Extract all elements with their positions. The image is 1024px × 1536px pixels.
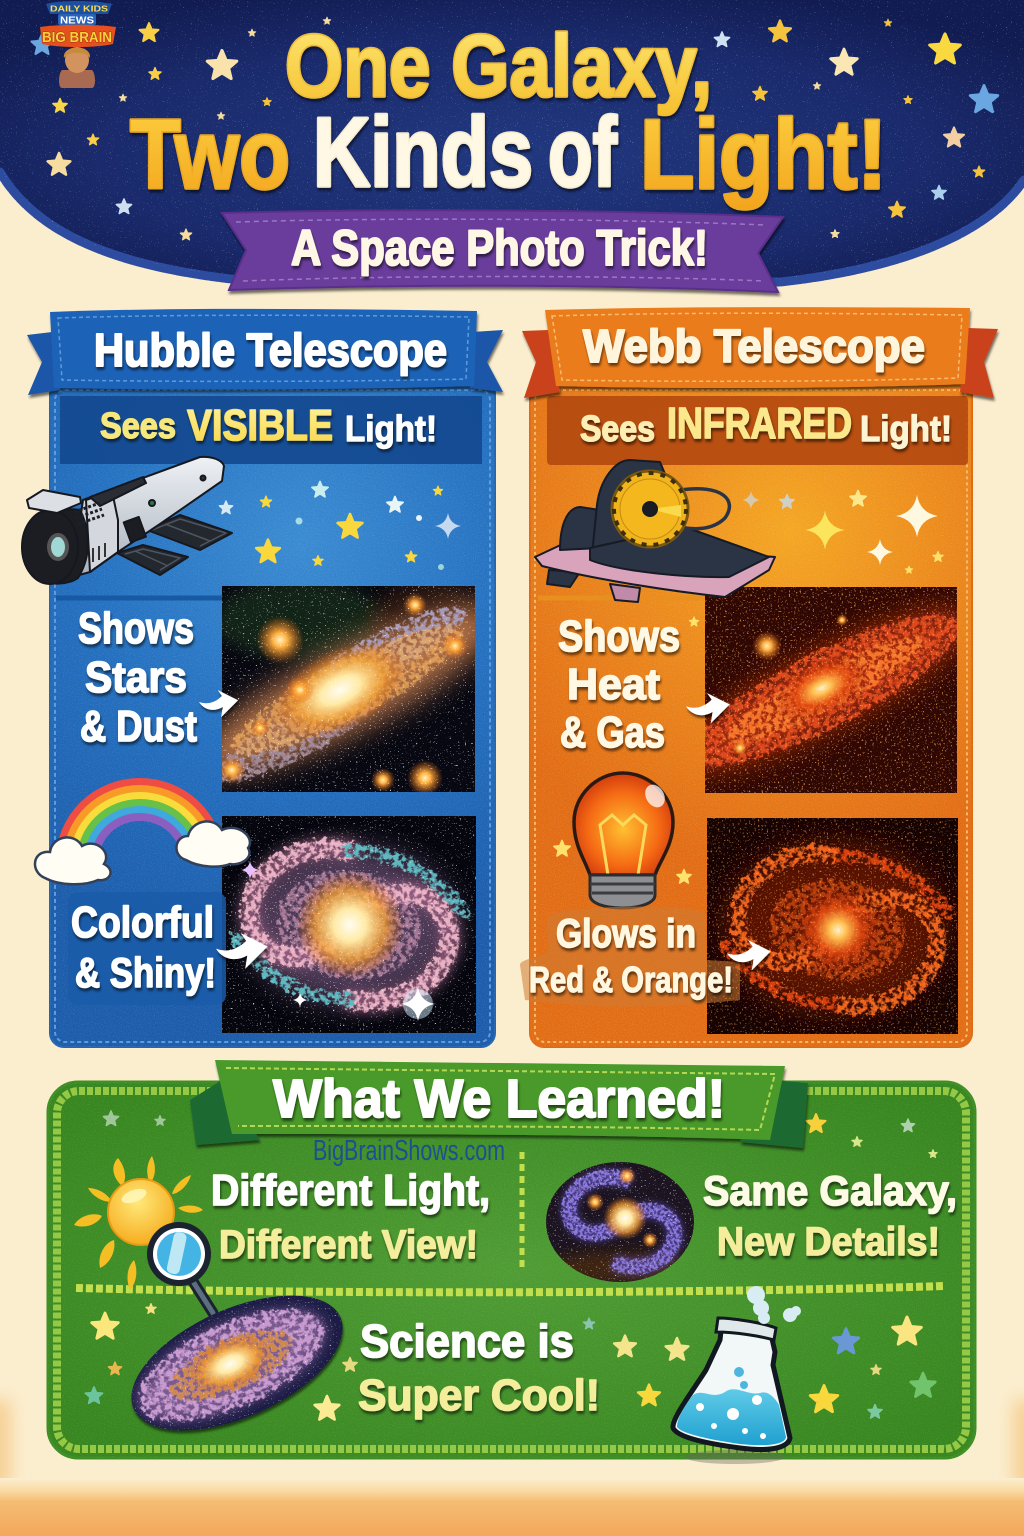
image: tilted galaxy <box>131 1296 345 1435</box>
header stars <box>48 17 998 240</box>
title: Light! <box>640 99 887 209</box>
arrow: to Webb galaxy <box>686 693 730 723</box>
text: Colorful & Shiny: & Shiny! <box>75 949 216 996</box>
text: Shows Heat & Gas: Shows <box>558 612 680 661</box>
text: Different Light, Different View <box>211 1166 490 1267</box>
text: Colorful & Shiny <box>68 892 226 1005</box>
text: Science is Super Cool <box>358 1315 600 1420</box>
logo: Daily Kids News Big Brain: DAILY KIDS <box>50 4 109 14</box>
subtitle ribbon <box>222 210 783 292</box>
rainbow icon <box>35 782 250 884</box>
text: Shows Heat & Gas: Heat <box>567 660 660 709</box>
arrow: to Hubble spiral <box>216 933 268 969</box>
icon: Webb telescope <box>535 460 775 602</box>
logo: Daily Kids News Big Brain: BIG BRAIN <box>42 29 112 46</box>
text: Sees INFRARED Light: Light! <box>860 408 952 449</box>
title: One Galaxy, <box>285 16 712 115</box>
text: Shows Heat & Gas: & Gas <box>560 708 665 757</box>
text: Glows in Red & Orange: Glows in <box>556 912 696 956</box>
text: Glows in Red & Orange: Red & Orange! <box>529 959 733 1000</box>
image: Webb infrared galaxy <box>705 587 957 793</box>
text: Sees INFRARED Light: Sees <box>580 408 655 449</box>
text: Shows Stars & Dust <box>78 604 197 751</box>
text: Glows in Red & Orange <box>520 907 740 1007</box>
image: Webb spiral galaxy <box>707 818 959 1034</box>
text: Same Galaxy, New Details <box>703 1167 957 1264</box>
text: Shows Stars & Dust: Shows <box>78 604 194 653</box>
text: Sees VISIBLE Light: Light! <box>345 408 437 449</box>
text: Sees INFRARED Light: INFRARED <box>667 399 852 448</box>
title: Kinds <box>313 97 533 207</box>
banner: Hubble Telescope <box>27 309 503 395</box>
text: Same Galaxy, New Details: Same Galaxy, <box>703 1167 957 1214</box>
watermark: BigBrainShows.com <box>313 1135 505 1167</box>
panel sparkles <box>554 490 943 883</box>
icon: light bulb <box>574 773 673 908</box>
heading: Hubble Telescope: Hubble Telescope <box>94 324 447 376</box>
text: Sees VISIBLE Light <box>100 401 437 450</box>
title: of <box>548 97 617 207</box>
text: Shows Stars & Dust: Stars <box>85 653 187 702</box>
text: Different Light, Different View: Different View! <box>219 1223 478 1267</box>
icon: sun and magnifier <box>74 1156 213 1313</box>
banner: What We Learned <box>190 1060 808 1148</box>
panel: Webb Telescope <box>520 307 998 1047</box>
image: Hubble spiral galaxy <box>222 816 476 1033</box>
text: Shows Heat & Gas <box>558 612 680 757</box>
panel: What We Learned <box>48 1060 975 1464</box>
arrow: to Hubble galaxy <box>199 690 238 717</box>
text: Sees VISIBLE Light: Sees <box>100 405 176 446</box>
text: Sees INFRARED Light <box>580 399 952 449</box>
text: Science is Super Cool: Super Cool! <box>358 1371 600 1420</box>
heading: What We Learned: What We Learned! <box>273 1069 725 1129</box>
panel stars <box>219 482 461 570</box>
text: Same Galaxy, New Details: New Details! <box>717 1220 940 1264</box>
section stars <box>85 1111 937 1420</box>
text: Shows Stars & Dust: & Dust <box>80 702 197 751</box>
header: night sky <box>0 0 1024 290</box>
logo: Daily Kids News Big Brain: NEWS <box>60 16 94 26</box>
text: Different Light, Different View: Different Light, <box>211 1166 490 1215</box>
title: Two <box>130 99 290 209</box>
icon: flask <box>673 1286 801 1464</box>
heading: Webb Telescope: Webb Telescope <box>583 320 925 372</box>
image: round galaxy <box>546 1162 694 1284</box>
arrow: to Webb spiral <box>727 940 771 970</box>
panel: Hubble Telescope <box>22 309 513 1047</box>
logo: Daily Kids News Big Brain <box>32 1 116 88</box>
title <box>130 16 887 209</box>
banner: Webb Telescope <box>522 307 998 398</box>
subtitle ribbon: A Space Photo Trick! <box>291 220 708 276</box>
text: Science is Super Cool: Science is <box>360 1315 574 1367</box>
icon: Hubble telescope <box>22 457 232 584</box>
image: Hubble visible galaxy <box>222 586 475 792</box>
text: Colorful & Shiny: Colorful <box>71 898 214 947</box>
text: Sees VISIBLE Light: VISIBLE <box>187 401 333 450</box>
